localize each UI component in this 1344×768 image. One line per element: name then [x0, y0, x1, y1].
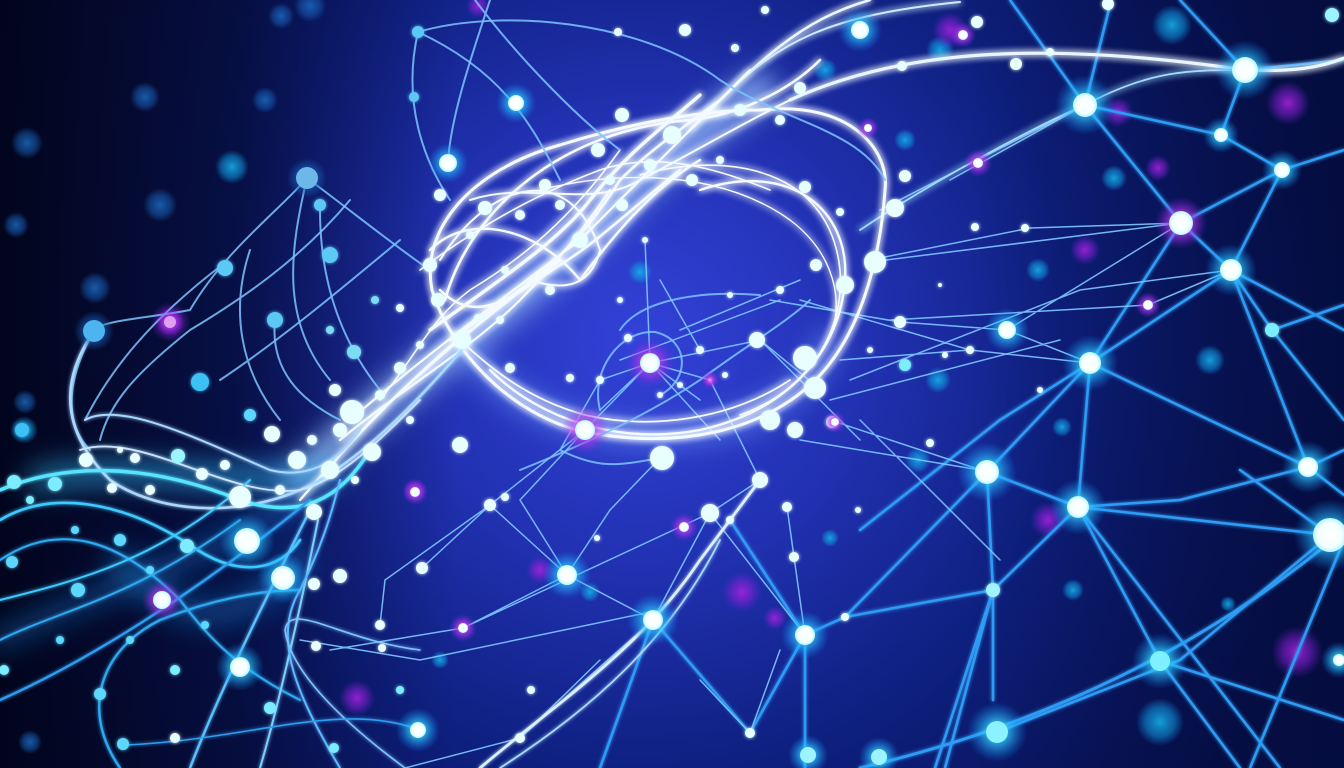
- network lines: central thin links: [300, 105, 1231, 768]
- wide diffuse glow under the dense strands: [0, 90, 830, 640]
- curved top sweep from centre to right edge: [690, 0, 1344, 230]
- network lines: right side straight links: [600, 0, 1344, 768]
- thin inner curves and top-left arcs: [72, 0, 885, 470]
- left swirl curves: [0, 331, 1344, 768]
- violet accent nodes: [142, 22, 1207, 642]
- large spiral loops around the centre: [300, 60, 885, 500]
